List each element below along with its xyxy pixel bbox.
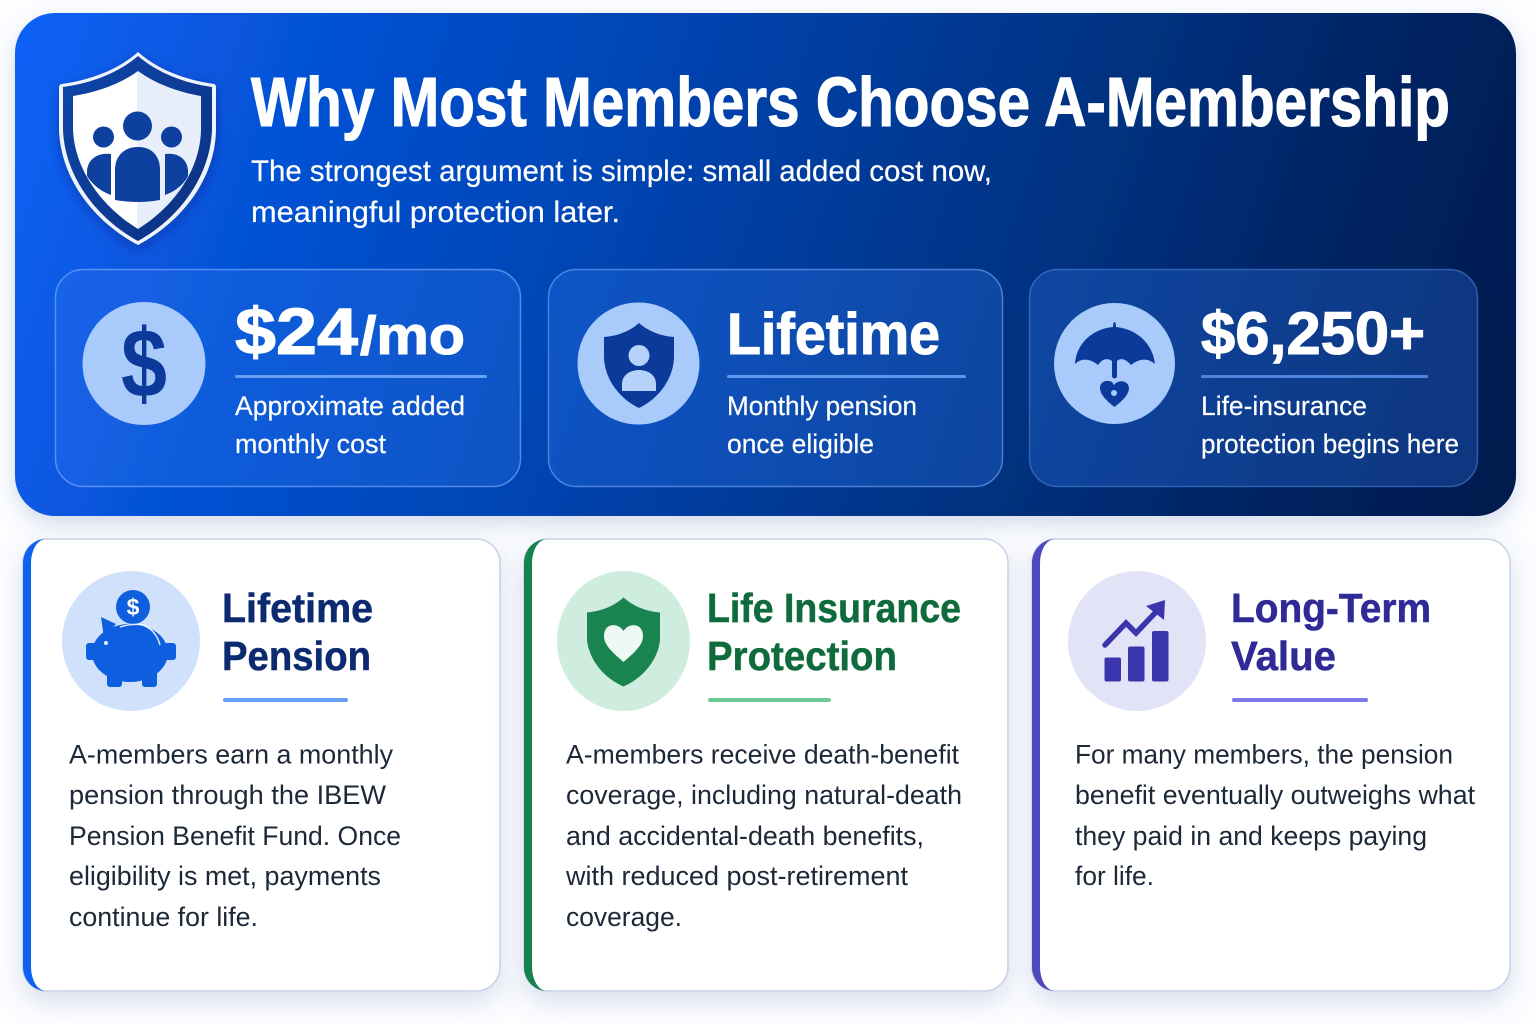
- icon: dollar: [82, 302, 206, 425]
- stat caption: Approximate added: [235, 391, 465, 421]
- stat caption: [727, 391, 917, 459]
- heading: Pension: [222, 633, 371, 679]
- stat caption: Life-insurance: [1201, 391, 1367, 421]
- icon: shield person: [578, 302, 700, 424]
- panel: long-term value: [1032, 539, 1510, 991]
- icon: shield with members: [59, 52, 216, 245]
- stat value: $24: [235, 294, 358, 368]
- body text: benefit eventually outweighs what: [1075, 780, 1475, 810]
- panel: lifetime pension: [23, 539, 500, 991]
- heading: [707, 585, 961, 679]
- body text: A-members receive death-benefit: [566, 740, 959, 770]
- body text: A-members earn a monthly: [69, 740, 393, 770]
- body text: for life.: [1075, 861, 1154, 891]
- body text: pension through the IBEW: [69, 780, 387, 810]
- subtitle: The strongest argument is simple: small added cost now,: [251, 155, 992, 188]
- heading: Life Insurance: [707, 585, 961, 631]
- icon: growth chart: [1068, 571, 1206, 711]
- heading: Value: [1231, 633, 1336, 679]
- stat card: $24/mo: [56, 270, 520, 486]
- stat card: $6,250+: [1030, 270, 1478, 486]
- body text: and accidental-death benefits,: [566, 821, 924, 851]
- heading: [222, 585, 373, 679]
- stat value: [235, 294, 465, 368]
- body text: For many members, the pension: [1075, 740, 1453, 770]
- icon: shield heart: [557, 571, 690, 711]
- icon: dollar: $: [121, 309, 167, 418]
- header panel: [15, 13, 1516, 516]
- stat value: /mo: [360, 306, 465, 366]
- body text: [1075, 740, 1475, 891]
- heading: Protection: [707, 633, 897, 679]
- body text: with reduced post-retirement: [565, 861, 908, 891]
- stat caption: Monthly pension: [727, 391, 917, 421]
- body text: eligibility is met, payments: [69, 861, 381, 891]
- body text: Pension Benefit Fund. Once: [69, 821, 401, 851]
- body text: coverage.: [566, 902, 682, 932]
- icon: piggy bank: $: [127, 594, 140, 620]
- heading: Long-Term: [1231, 585, 1431, 631]
- body text: [565, 740, 962, 932]
- subtitle: meaningful protection later.: [251, 196, 620, 229]
- stat caption: protection begins here: [1201, 429, 1459, 459]
- body text: [69, 740, 401, 932]
- stat value: $6,250+: [1201, 300, 1425, 367]
- heading: [1231, 585, 1431, 679]
- stat value: Lifetime: [727, 302, 940, 367]
- body text: they paid in and keeps paying: [1075, 821, 1427, 851]
- stat caption: once eligible: [727, 429, 874, 459]
- icon: piggy bank: [62, 571, 200, 711]
- stat card: Lifetime: [548, 270, 1002, 486]
- body text: coverage, including natural-death: [566, 780, 962, 810]
- icon: umbrella heart: [1054, 303, 1175, 424]
- body text: continue for life.: [69, 902, 258, 932]
- stat caption: [235, 391, 465, 459]
- stat caption: [1201, 391, 1459, 459]
- subtitle: [251, 155, 992, 229]
- heading: Lifetime: [222, 585, 373, 631]
- panel: life insurance protection: [524, 539, 1008, 991]
- stat caption: monthly cost: [235, 429, 386, 459]
